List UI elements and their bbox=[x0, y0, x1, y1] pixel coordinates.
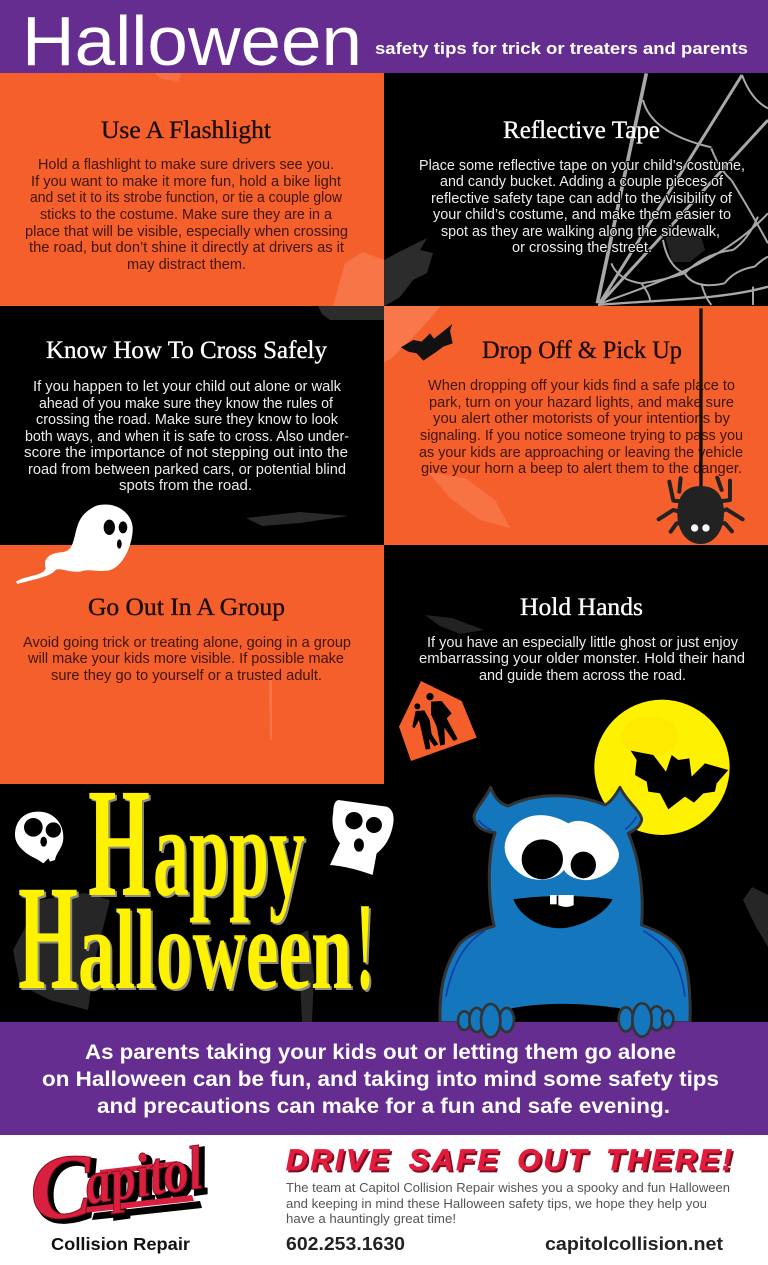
yellow lettering: appy bbox=[153, 781, 305, 923]
text block: may distract them. bbox=[127, 257, 246, 273]
text block: When dropping off your kids find a safe place to bbox=[428, 378, 735, 394]
text block bbox=[24, 379, 349, 494]
heading: Drop Off & Pick Up bbox=[482, 337, 682, 364]
text block: ahead of you make sure they know the rules of bbox=[39, 396, 334, 412]
closing message: and precautions can make for a fun and safe evening. bbox=[97, 1095, 670, 1118]
icon: skull left bbox=[15, 812, 63, 863]
text block bbox=[25, 157, 348, 273]
text block bbox=[419, 158, 745, 256]
logo: capitol: apitol bbox=[84, 1138, 211, 1222]
panel: reflective tape bbox=[384, 73, 768, 306]
text block: park, turn on your hazard lights, and make sure bbox=[429, 395, 734, 411]
panel: drop off and pick up bbox=[384, 306, 768, 545]
logo: capitol bbox=[26, 1134, 211, 1243]
text block: will make your kids more visible. If possible make bbox=[27, 651, 344, 667]
footer text: have a hauntingly great time! bbox=[286, 1211, 456, 1226]
text block: sure they go to yourself or a trusted adult. bbox=[51, 668, 322, 684]
yellow lettering: alloween bbox=[78, 886, 352, 1013]
phone number: 602.253.1630 bbox=[286, 1234, 405, 1254]
shadow lettering: H bbox=[90, 758, 152, 931]
closing message bbox=[42, 1041, 719, 1118]
heading: Use A Flashlight bbox=[101, 117, 271, 144]
icon: moon with bat bbox=[594, 700, 730, 835]
icon: ghost bbox=[16, 505, 133, 584]
purple message band bbox=[0, 1022, 768, 1135]
text block: embarrassing your older monster. Hold their hand bbox=[419, 651, 745, 667]
brush smudges behind greeting bbox=[13, 887, 768, 1022]
spider web bbox=[597, 73, 768, 305]
text block: place that will be visible, especially when crossing bbox=[25, 224, 348, 240]
text block: or crossing the street. bbox=[512, 240, 652, 256]
heading: Go Out In A Group bbox=[88, 594, 285, 621]
text block: and guide them across the road. bbox=[479, 668, 686, 684]
closing message: on Halloween can be fun, and taking into mind some safety tips bbox=[42, 1068, 719, 1091]
panel: use a flashlight bbox=[0, 73, 384, 306]
shadow lettering: alloween bbox=[80, 888, 354, 1015]
infographic canvas: ! bbox=[358, 880, 376, 1018]
footer panel bbox=[0, 1134, 768, 1265]
text block: score the importance of not stepping out into the bbox=[24, 445, 348, 461]
title: Halloween bbox=[22, 2, 362, 80]
text block: If you want to make it more fun, hold a bike light bbox=[31, 174, 341, 190]
panel: hold hands bbox=[384, 545, 768, 784]
text block: your child’s costume, and make them easier to bbox=[433, 207, 731, 223]
text block: Hold a flashlight to make sure drivers see you. bbox=[38, 157, 334, 173]
text block: sticks to the costume. Make sure they are in a bbox=[40, 207, 333, 223]
footer text bbox=[286, 1180, 730, 1226]
logo: capitol: C bbox=[30, 1137, 101, 1243]
text block bbox=[23, 635, 351, 684]
shadow lettering: appy bbox=[155, 783, 307, 925]
text block: give your horn a beep to alert them to the danger. bbox=[421, 461, 742, 477]
text block: road from between parked cars, or potential blind bbox=[28, 462, 346, 478]
text block: Avoid going trick or treating alone, going in a group bbox=[23, 635, 351, 651]
heading: Hold Hands bbox=[520, 594, 643, 621]
panel: know how to cross safely bbox=[0, 306, 384, 545]
text block: and candy bucket. Adding a couple pieces of bbox=[440, 174, 724, 190]
text block bbox=[419, 635, 745, 684]
logo: collision repair: Collision Repair bbox=[51, 1234, 190, 1254]
text block bbox=[419, 378, 743, 477]
text block: you alert other motorists of your intentions by bbox=[433, 411, 731, 427]
text block: signaling. If you notice someone trying to pass you bbox=[420, 428, 743, 444]
yellow lettering: H bbox=[18, 855, 78, 1021]
text block: If you happen to let your child out alone or walk bbox=[33, 379, 342, 395]
icon: pedestrian crossing sign bbox=[399, 681, 477, 761]
heading: drive safe: DRIVE SAFE OUT THERE! bbox=[286, 1144, 732, 1177]
logo: capitol: C bbox=[26, 1134, 97, 1240]
text block: as your kids are approaching or leaving the vehicle bbox=[419, 445, 743, 461]
text block: and set it to its strobe function, or tie a couple glow bbox=[30, 190, 342, 206]
text block: reflective safety tape can add to the visibility of bbox=[431, 191, 733, 207]
header banner bbox=[0, 0, 768, 80]
text block: Place some reflective tape on your child’s costume, bbox=[419, 158, 745, 174]
text block: spots from the road. bbox=[119, 478, 252, 494]
greeting: happy halloween bbox=[18, 756, 376, 1023]
subtitle: safety tips for trick or treaters and parents bbox=[375, 40, 748, 58]
shadow lettering bbox=[20, 758, 376, 1023]
heading: drive safe: DRIVE SAFE OUT THERE! bbox=[288, 1146, 734, 1179]
panel: go out in a group bbox=[0, 545, 384, 784]
shadow lettering: H bbox=[20, 857, 80, 1023]
yellow lettering: H bbox=[88, 756, 150, 929]
text block: crossing the road. Make sure they know to look bbox=[36, 412, 339, 428]
text block: both ways, and when it is safe to cross. Also under- bbox=[25, 429, 349, 445]
icon: blue monster bbox=[440, 787, 690, 1023]
icon: skull right bbox=[330, 800, 394, 875]
heading: Reflective Tape bbox=[503, 117, 660, 144]
website: capitolcollision.net bbox=[545, 1234, 723, 1254]
footer text: and keeping in mind these Halloween safety tips, we hope they help you bbox=[286, 1196, 707, 1211]
text block: If you have an especially little ghost or just enjoy bbox=[427, 635, 739, 651]
logo: capitol: apitol bbox=[80, 1134, 207, 1218]
icon: hanging spider bbox=[659, 308, 743, 544]
icon: bat bbox=[401, 324, 453, 361]
infographic canvas: ! bbox=[356, 878, 374, 1016]
footer text: The team at Capitol Collision Repair wishes you a spooky and fun Halloween bbox=[286, 1180, 730, 1195]
heading: Know How To Cross Safely bbox=[46, 337, 327, 364]
closing message: As parents taking your kids out or letting them go alone bbox=[85, 1041, 676, 1064]
text block: spot as they are walking along the sidewalk, bbox=[441, 224, 720, 240]
text block: the road, but don’t shine it directly at drivers as it bbox=[29, 240, 344, 256]
yellow lettering bbox=[18, 756, 374, 1021]
icon: monster hands bbox=[458, 1003, 673, 1037]
